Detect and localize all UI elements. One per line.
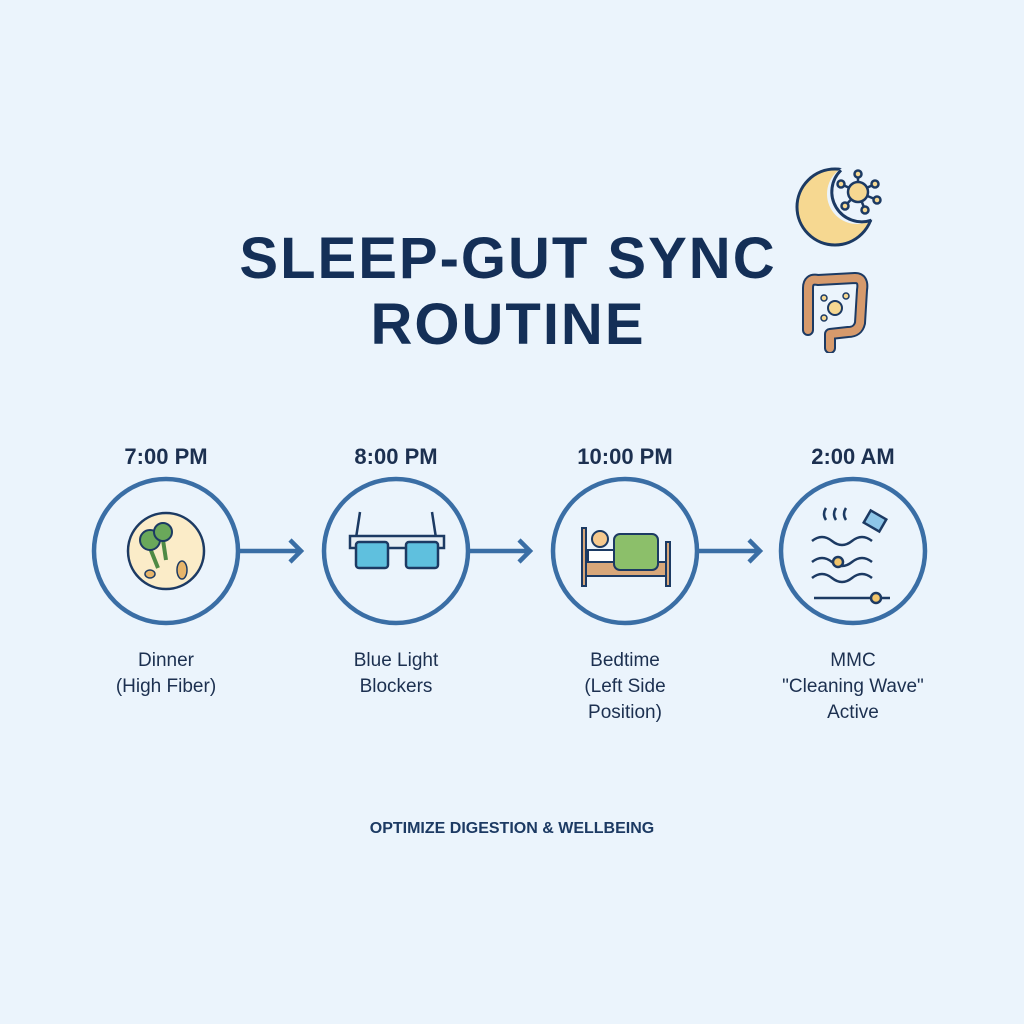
text: "Cleaning Wave" [782,676,924,697]
title: ROUTINE [370,292,646,357]
title: SLEEP-GUT SYNC [239,226,777,291]
text: (Left Side [584,676,666,697]
text: Blockers [360,676,432,697]
title [239,226,777,357]
text: Bedtime [590,650,660,671]
icon: glasses [350,512,444,568]
footer: OPTIMIZE DIGESTION & WELLBEING [370,820,654,837]
text: 2:00 AM [811,444,895,469]
times: 7:00 PM [124,444,208,469]
labels: Dinner [138,650,194,671]
icon: intestine [802,272,868,353]
labels: (High Fiber) [116,676,216,697]
text: Active [827,702,879,723]
labels [116,650,216,697]
text: MMC [830,650,876,671]
timeline [92,476,928,626]
text: 10:00 PM [577,444,673,469]
text: Blue Light [354,650,438,671]
icon: waves [812,508,890,603]
text: Position) [588,702,662,723]
icon: plate [128,513,204,589]
icon: bed [582,528,670,586]
icon: moon and microbe [796,168,882,246]
text: 8:00 PM [354,444,438,469]
